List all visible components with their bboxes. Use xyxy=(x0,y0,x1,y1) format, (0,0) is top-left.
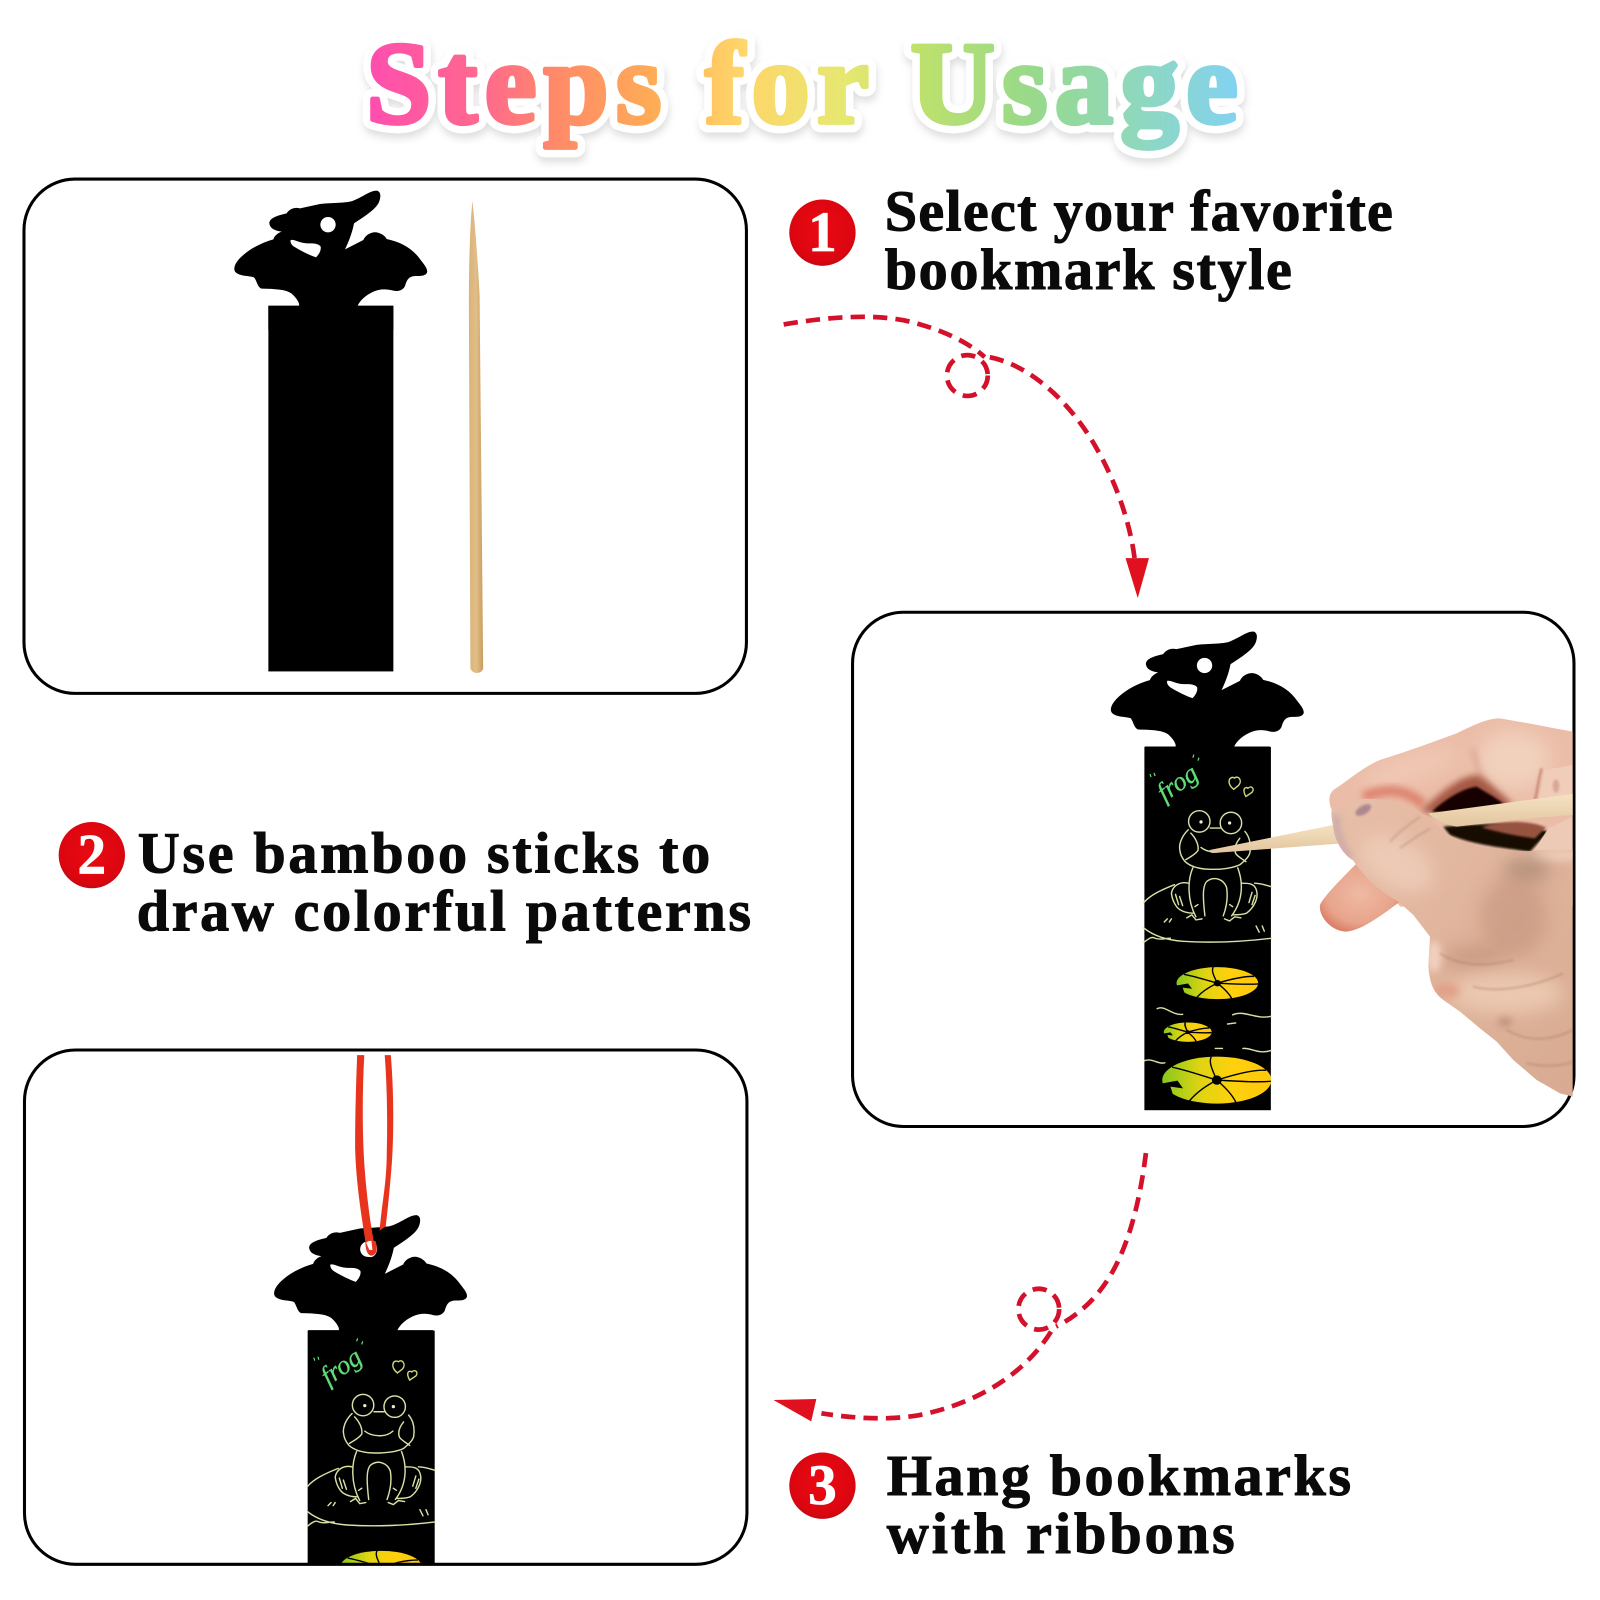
icon: blank black bookmark xyxy=(234,191,427,671)
icon: scratched frog bookmark xyxy=(1111,631,1304,1110)
step 1 text: Select your favorite xyxy=(885,179,1393,244)
step 3 text: Hang bookmarks xyxy=(887,1443,1351,1508)
title: Steps for Usage xyxy=(366,19,1238,148)
step 1 text: bookmark style xyxy=(885,237,1292,302)
step 3 number badge xyxy=(789,1453,856,1519)
step 2 number badge xyxy=(59,822,125,888)
step 1 number badge xyxy=(789,199,856,266)
step 2 text xyxy=(137,820,751,944)
icon: bamboo stick xyxy=(469,201,483,673)
panel: step 3 hanging bookmark xyxy=(24,1050,747,1583)
step 3 number badge: 3 xyxy=(808,1454,837,1517)
step 2 number badge: 2 xyxy=(78,823,106,886)
step 1 text xyxy=(885,179,1393,302)
icon: hand holding bamboo stick xyxy=(1210,718,1580,1097)
arrow: step 1 to step 2 xyxy=(784,317,1149,598)
step 2 text: Use bamboo sticks to xyxy=(138,820,710,885)
step 3 text xyxy=(887,1443,1351,1566)
panel: step 2 scratching with stick xyxy=(853,612,1580,1127)
step 2 text: draw colorful patterns xyxy=(137,879,751,944)
title: Steps for Usage xyxy=(366,19,1238,148)
panel: step 1 bookmark and stick xyxy=(24,179,746,693)
step 1 number badge: 1 xyxy=(808,201,837,264)
step 3 text: with ribbons xyxy=(887,1501,1235,1566)
arrow: step 2 to step 3 xyxy=(773,1153,1146,1421)
icon: bookmark with red ribbon xyxy=(274,1055,467,1583)
